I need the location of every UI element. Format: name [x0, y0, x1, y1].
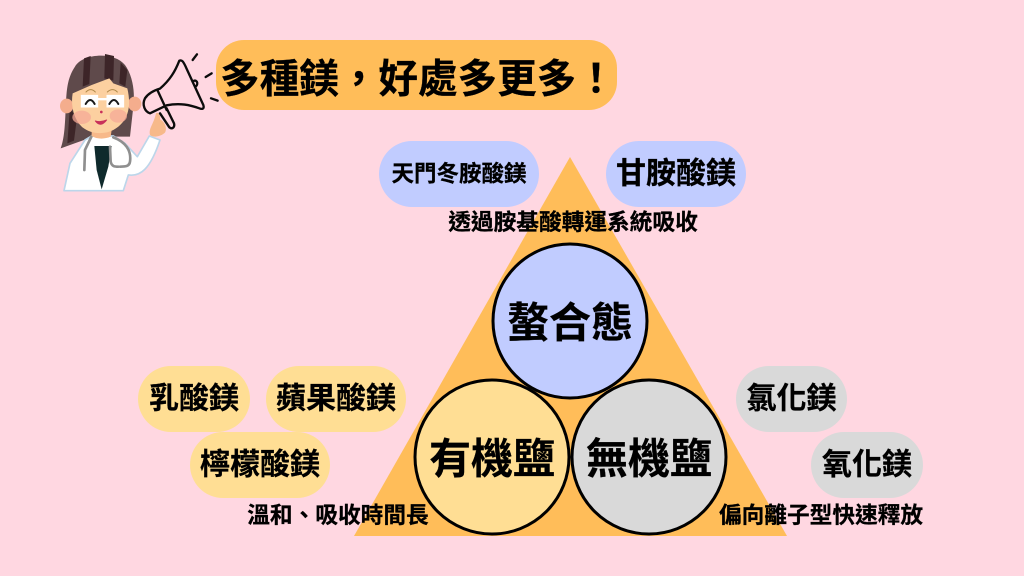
pill: 乳酸鎂: 乳酸鎂	[149, 382, 239, 416]
pill: 天門冬胺酸鎂: 天門冬胺酸鎂	[391, 162, 527, 186]
circle: 螯合態	[493, 244, 647, 398]
circle: 有機鹽	[415, 380, 569, 534]
pill: 氯化鎂: 氯化鎂	[746, 382, 836, 416]
icon: megaphone	[144, 60, 204, 128]
pill: 檸檬酸鎂: 檸檬酸鎂	[200, 448, 320, 482]
doctor face	[72, 78, 129, 133]
icon: megaphone sound lines	[193, 54, 218, 101]
doctor shirt	[94, 146, 112, 189]
pill: 檸檬酸鎂	[190, 432, 330, 498]
pill: 氧化鎂	[811, 432, 923, 498]
doctor ears	[60, 99, 73, 113]
pill: 甘胺酸鎂: 甘胺酸鎂	[616, 158, 736, 190]
caption: chelated: 透過胺基酸轉運系統吸收	[448, 209, 698, 235]
pill: 天門冬胺酸鎂	[379, 141, 539, 207]
pill: 氯化鎂	[736, 366, 847, 432]
icon: doctor with megaphone	[60, 54, 218, 191]
doctor coat	[64, 136, 160, 191]
circle: 無機鹽	[572, 380, 726, 534]
pill: 蘋果酸鎂: 蘋果酸鎂	[276, 382, 396, 416]
doctor stethoscope	[84, 136, 130, 170]
doctor hand	[150, 113, 166, 137]
doctor neck	[92, 130, 112, 139]
pill: 乳酸鎂	[138, 366, 250, 432]
triangle background	[354, 157, 787, 536]
caption: inorganic: 偏向離子型快速釋放	[719, 502, 923, 528]
doctor glasses	[82, 96, 123, 107]
doctor hair back	[61, 56, 134, 148]
pill: 氧化鎂: 氧化鎂	[822, 448, 912, 482]
pill: 甘胺酸鎂	[606, 141, 746, 207]
circle: 有機鹽: 有機鹽	[429, 436, 555, 482]
caption: organic: 溫和、吸收時間長	[247, 502, 429, 528]
pill: 蘋果酸鎂	[266, 366, 406, 432]
title banner: 多種鎂，好處多更多！	[220, 48, 616, 104]
circle: 無機鹽: 無機鹽	[586, 436, 712, 482]
circle: 螯合態: 螯合態	[507, 300, 633, 346]
